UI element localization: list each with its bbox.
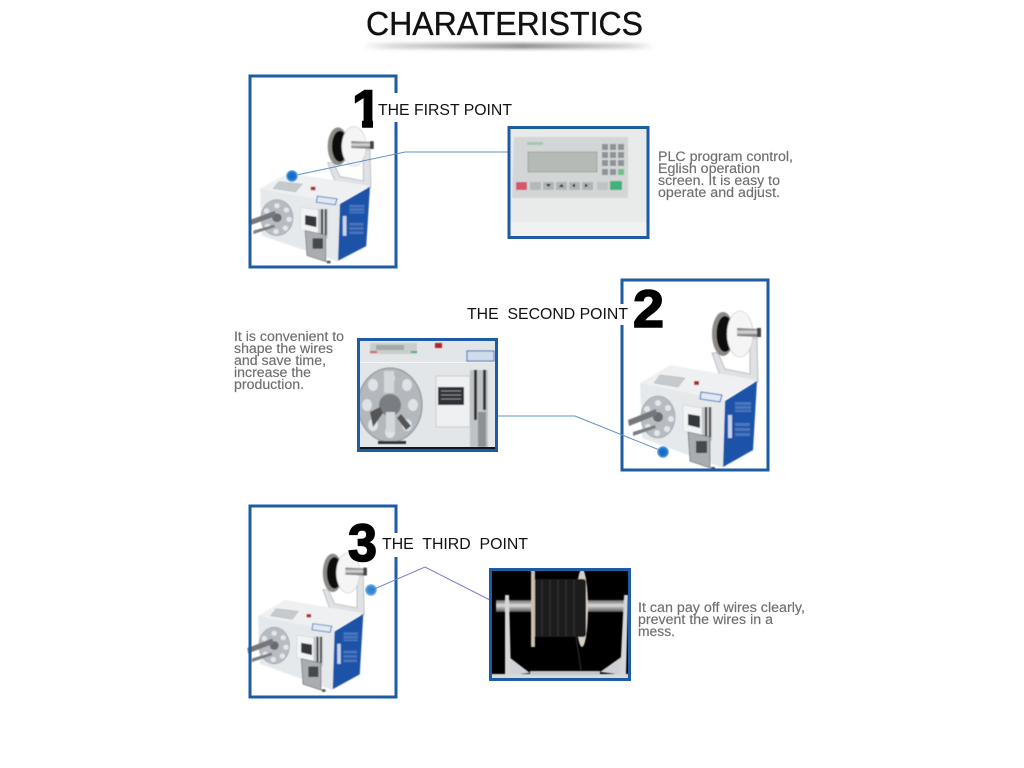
panel: wire spool close-up bbox=[490, 569, 630, 680]
heading: the first point: THE FIRST POINT bbox=[378, 102, 512, 119]
text: wheel description: shape the wires bbox=[234, 341, 333, 356]
text: wheel description: and save time, bbox=[234, 353, 326, 368]
connector: third point bbox=[372, 567, 490, 600]
panel: first point machine bbox=[249, 76, 396, 267]
number 3: 3 bbox=[348, 514, 377, 573]
marker: third point bbox=[365, 584, 377, 596]
text: wheel description: It is convenient to bbox=[234, 329, 344, 344]
frame: first point bbox=[250, 76, 396, 267]
panel: second point machine bbox=[622, 280, 768, 470]
text: spool description bbox=[638, 600, 805, 639]
title: CHARATERISTICS bbox=[366, 5, 643, 42]
panel: third point machine bbox=[247, 506, 396, 697]
text: wheel description: increase the bbox=[234, 365, 311, 380]
panel: PLC control close-up bbox=[509, 127, 648, 238]
text: PLC description: screen. It is easy to bbox=[658, 173, 780, 188]
frame: wheel close-up bbox=[358, 340, 496, 450]
heading: the third point: THE THIRD POINT bbox=[382, 536, 528, 553]
text: spool description: prevent the wires in a bbox=[638, 612, 774, 627]
frame: spool close-up bbox=[490, 570, 630, 680]
number 1: 1 bbox=[352, 80, 381, 139]
text: PLC description: Eglish operation bbox=[658, 161, 760, 176]
text: wheel description bbox=[234, 329, 344, 392]
number 2: 2 bbox=[633, 280, 664, 339]
connector: second point bbox=[497, 416, 662, 451]
connector: first point bbox=[292, 152, 509, 176]
frame: PLC close-up bbox=[509, 128, 648, 238]
text: spool description: It can pay off wires clearly, bbox=[638, 600, 805, 615]
text: PLC description: PLC program control, bbox=[658, 149, 793, 164]
text: PLC description bbox=[658, 149, 793, 200]
text: wheel description: production. bbox=[234, 377, 304, 392]
text: spool description: mess. bbox=[638, 624, 675, 639]
frame: third point bbox=[250, 506, 396, 697]
text: PLC description: operate and adjust. bbox=[658, 185, 780, 200]
panel: winding wheel close-up bbox=[358, 339, 497, 451]
heading: the second point: THE SECOND POINT bbox=[467, 306, 628, 323]
frame: second point bbox=[622, 280, 768, 470]
title shadow bar bbox=[362, 43, 654, 49]
marker: second point bbox=[657, 446, 669, 458]
marker: first point bbox=[286, 170, 298, 182]
